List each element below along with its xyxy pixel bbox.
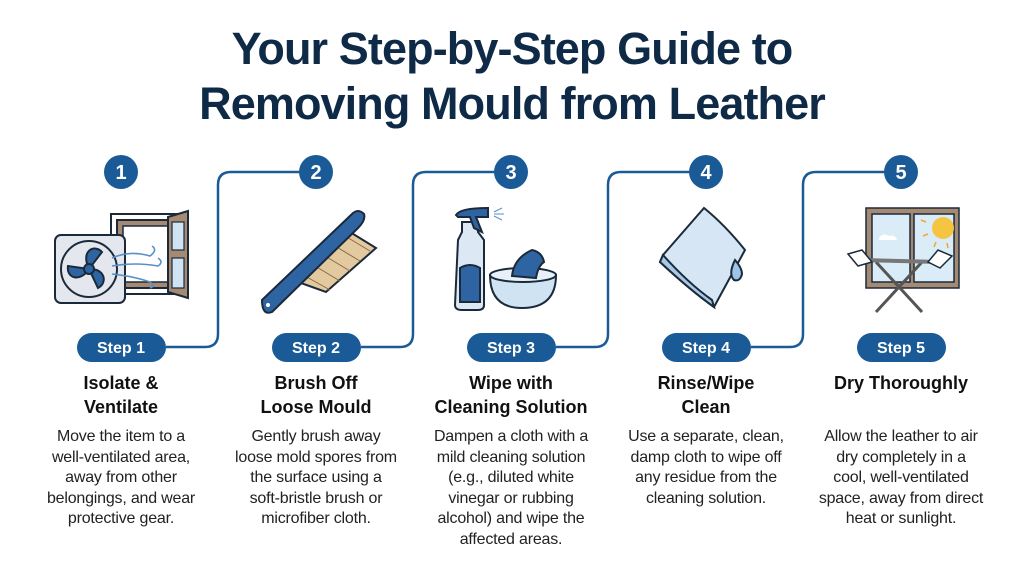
step 3 text: Cleaning Solution (434, 397, 588, 417)
number circles: 5 (895, 162, 907, 184)
step 1 text: Ventilate (84, 397, 158, 417)
step pills: Step 3 (487, 340, 535, 357)
step 5 text: Dry Thoroughly (834, 373, 968, 393)
step 2 text (235, 373, 397, 527)
step 4 text: damp cloth to wipe off (631, 448, 781, 466)
number circles: 2 (310, 162, 322, 184)
step 4 text: Rinse/Wipe (658, 373, 754, 393)
step 5 text: heat or sunlight. (846, 510, 956, 527)
step 1 text (47, 373, 195, 527)
icon: window and drying rack (848, 208, 959, 312)
step 2 text: the surface using a (250, 469, 382, 486)
step 3 text: affected areas. (460, 530, 562, 548)
step 5 text: dry completely in a (836, 448, 966, 466)
icon: spray bottle and bowl (455, 208, 556, 310)
icon: brush (262, 211, 376, 313)
title: Removing Mould from Leather (199, 78, 825, 129)
step pills: Step 1 (97, 340, 145, 357)
step pills (77, 333, 946, 362)
step 2 text: loose mold spores from (235, 448, 397, 466)
step 2 text: microfiber cloth. (261, 510, 371, 527)
step 3 text: Wipe with (469, 373, 553, 393)
step 4 text: any residue from the (635, 469, 777, 486)
number circles: 3 (505, 162, 517, 184)
step pills: Step 2 (292, 340, 340, 357)
step 1 text: Move the item to a (57, 428, 185, 445)
step 4 text: cleaning solution. (646, 490, 766, 506)
icon: fan and window (55, 211, 188, 303)
step 1 text: Isolate & (83, 373, 159, 393)
step 4 text (628, 373, 784, 506)
title (199, 23, 826, 129)
connectors (166, 172, 885, 347)
step 1 text: protective gear. (68, 510, 174, 527)
step 3 text: mild cleaning solution (437, 448, 585, 466)
step 3 text (434, 373, 588, 548)
step 1 text: away from other (65, 469, 177, 486)
step 2 text: soft-bristle brush or (250, 490, 382, 506)
step 4 text: Use a separate, clean, (628, 428, 784, 445)
step 3 text: vinegar or rubbing (448, 490, 574, 506)
step 5 text: space, away from direct (819, 490, 983, 506)
icon: cloth with drop (660, 208, 745, 307)
step 1 text: well-ventilated area, (52, 448, 190, 466)
step 4 text: Clean (681, 397, 731, 417)
step 2 text: Loose Mould (260, 397, 372, 417)
step 2 text: Brush Off (274, 373, 358, 393)
step pills: Step 5 (877, 340, 925, 357)
step 5 text: Allow the leather to air (824, 428, 978, 445)
step 5 text: cool, well-ventilated (833, 469, 969, 486)
number circles (104, 155, 918, 189)
step pills: Step 4 (682, 340, 730, 357)
step 5 text (819, 373, 984, 527)
number circles: 4 (700, 162, 712, 184)
number circles: 1 (115, 162, 127, 184)
step 3 text: (e.g., diluted white (448, 469, 574, 486)
step 1 text: belongings, and wear (47, 490, 195, 506)
title: Your Step-by-Step Guide to (232, 23, 792, 74)
step 3 text: alcohol) and wipe the (437, 510, 584, 527)
step 3 text: Dampen a cloth with a (434, 428, 588, 445)
step 2 text: Gently brush away (251, 428, 381, 445)
